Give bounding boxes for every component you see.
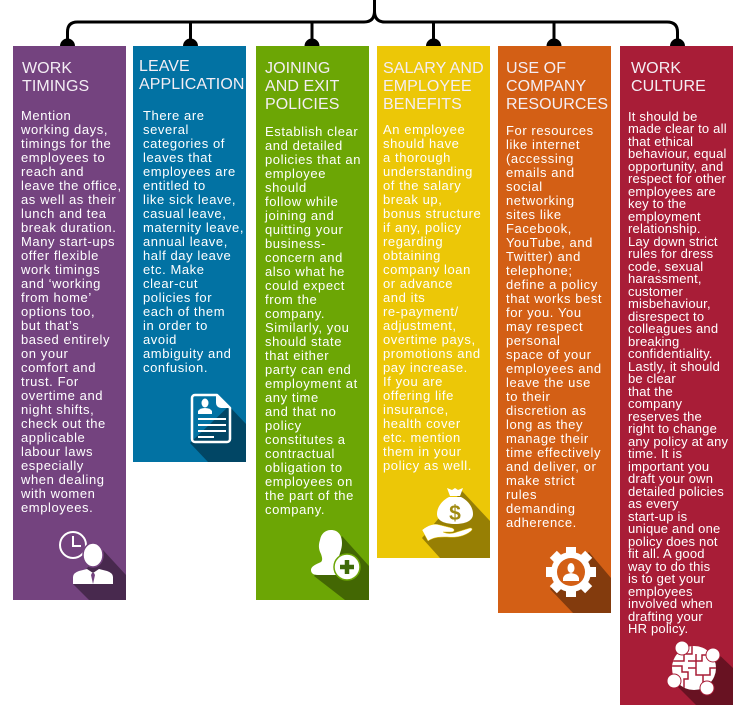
text: work culture: any policy at any: [628, 434, 728, 448]
text: joining and exit policies: quitting your: [265, 222, 343, 237]
text: joining and exit policies: policy: [265, 418, 302, 433]
text: leave application: leaves that: [143, 150, 212, 165]
text: work culture: fit all. A good: [628, 546, 705, 561]
text: joining and exit policies: any time: [265, 390, 319, 405]
text: salary and employee benefits: health cover: [383, 416, 461, 431]
text: work culture: Lay down strict: [628, 234, 718, 248]
text: salary and employee benefits: break up,: [383, 192, 442, 207]
text: joining and exit policies: that either: [265, 348, 329, 363]
text: salary and employee benefits: insurance,: [383, 402, 449, 417]
text: joining and exit policies: company.: [265, 306, 325, 321]
heading: use of company resources: COMPANY: [506, 78, 586, 95]
text: salary and employee benefits: of the salary: [383, 178, 461, 193]
text: salary and employee benefits: them in your: [383, 444, 462, 459]
text: work timings: reach and: [21, 164, 84, 179]
text: work culture: misbehaviour,: [628, 296, 711, 311]
text: work timings: on your: [21, 346, 68, 361]
text: work timings: especially: [21, 458, 84, 473]
text: salary and employee benefits: An employee: [383, 122, 465, 137]
text: work culture: employment: [628, 208, 701, 224]
text: salary and employee benefits: policy as well.: [383, 458, 472, 473]
text: work timings: working days,: [21, 122, 108, 137]
text: work culture: time. It is: [628, 446, 682, 461]
panel: work culture: [620, 46, 733, 705]
text: work timings: check out the: [21, 416, 106, 431]
text: work timings: [21, 108, 122, 515]
heading: leave application: APPLICATION: [139, 76, 244, 93]
text: leave application: confusion.: [143, 360, 208, 375]
text: work culture: detailed policies: [628, 484, 724, 498]
text: work culture: It should be: [628, 108, 698, 124]
text: joining and exit policies: party can end: [265, 362, 351, 377]
text: salary and employee benefits: company loan: [383, 262, 471, 277]
heading: use of company resources: USE OF: [506, 60, 566, 77]
text: work culture: that ethical: [628, 134, 693, 148]
text: work timings: applicable: [21, 430, 85, 445]
text: joining and exit policies: employees on: [265, 474, 353, 489]
text: salary and employee benefits: understanding: [383, 164, 473, 179]
icon: team puzzle: [668, 642, 733, 705]
text: joining and exit policies: policies that an: [265, 152, 361, 167]
text: leave application: entitled to: [143, 178, 206, 193]
text: salary and employee benefits: promotions and: [383, 346, 481, 361]
text: use of company resources: demanding: [506, 501, 576, 516]
text: leave application: avoid: [143, 332, 177, 347]
text: work timings: trust. For: [21, 374, 79, 389]
text: work culture: draft your own: [628, 471, 713, 486]
text: work culture: breaking: [628, 334, 679, 348]
text: use of company resources: discretion as: [506, 403, 587, 418]
text: joining and exit policies: concern and: [265, 250, 343, 265]
text: work timings: lunch and tea: [21, 206, 107, 221]
text: work timings: employees.: [21, 500, 93, 515]
heading: work timings: TIMINGS: [22, 78, 89, 95]
text: use of company resources: leave the use: [506, 375, 591, 390]
text: joining and exit policies: and that no: [265, 404, 336, 419]
panel: salary and employee benefits: [377, 46, 490, 558]
text: work timings: as well as their: [21, 192, 116, 207]
text: salary and employee benefits: pay increase.: [383, 360, 468, 375]
text: work culture: drafting your: [628, 608, 703, 624]
text: use of company resources: [506, 123, 602, 530]
heading: work culture: [631, 60, 706, 95]
text: use of company resources: define a policy: [506, 277, 598, 292]
text: salary and employee benefits: regarding: [383, 234, 443, 249]
text: use of company resources: to their: [506, 389, 550, 404]
text: work culture: be clear: [628, 371, 676, 386]
text: use of company resources: emails and: [506, 165, 575, 180]
text: use of company resources: personal: [506, 333, 561, 348]
text: salary and employee benefits: or advance: [383, 276, 453, 291]
text: joining and exit policies: business-: [265, 236, 326, 251]
text: leave application: several: [143, 122, 189, 137]
text: joining and exit policies: contractual: [265, 446, 335, 461]
icon: money bag in hand: [422, 488, 490, 558]
text: joining and exit policies: should state: [265, 334, 342, 349]
text: use of company resources: employees and: [506, 361, 602, 376]
text: work culture: right to change: [628, 421, 717, 436]
text: joining and exit policies: also what he: [265, 264, 345, 279]
text: leave application: categories of: [143, 136, 225, 151]
text: salary and employee benefits: bonus structure: [383, 206, 481, 221]
text: work timings: employees to: [21, 150, 105, 165]
text: salary and employee benefits: should have: [383, 136, 460, 151]
icon: clock and manager: [59, 531, 126, 600]
text: salary and employee benefits: obtaining: [383, 248, 441, 263]
text: work culture: way to do this: [628, 558, 710, 574]
text: leave application: There are: [143, 108, 205, 123]
text: joining and exit policies: employee: [265, 166, 326, 181]
text: use of company resources: (accessing: [506, 151, 574, 166]
heading: work timings: WORK: [22, 60, 72, 77]
heading: joining and exit policies: [265, 60, 340, 113]
text: use of company resources: that works best: [506, 291, 602, 306]
text: use of company resources: and deliver, or: [506, 459, 596, 474]
text: joining and exit policies: Establish clear: [265, 124, 358, 139]
text: work timings: Many start-ups: [21, 234, 115, 249]
heading: leave application: LEAVE: [139, 58, 190, 75]
text: work timings: work timings: [21, 262, 100, 277]
text: work timings: break duration.: [21, 220, 116, 235]
text: use of company resources: Facebook,: [506, 221, 572, 236]
text: work culture: employees: [628, 584, 693, 598]
text: salary and employee benefits: adjustment,: [383, 318, 457, 333]
text: work culture: customer: [628, 284, 683, 298]
text: work timings: with women: [21, 486, 95, 501]
text: joining and exit policies: constitutes a: [265, 432, 346, 447]
panel: work timings: [13, 46, 126, 600]
text: leave application: clear-cut: [143, 276, 198, 291]
text: work culture: important you: [628, 458, 709, 474]
text: joining and exit policies: could expect: [265, 278, 345, 293]
text: work culture: harassment,: [628, 271, 702, 286]
text: work culture: company: [628, 396, 682, 411]
heading: salary and employee benefits: EMPLOYEE: [383, 78, 472, 95]
text: leave application: maternity leave,: [143, 220, 244, 235]
text: work timings: comfort and: [21, 360, 96, 375]
text: use of company resources: networking: [506, 193, 575, 208]
text: use of company resources: may respect: [506, 319, 583, 334]
text: work timings: but that’s: [21, 318, 79, 333]
text: salary and employee benefits: [383, 122, 481, 473]
text: salary and employee benefits: overtime pays,: [383, 332, 476, 347]
text: leave application: each of them: [143, 304, 225, 319]
text: work timings: based entirely: [21, 332, 110, 347]
text: work culture: as every: [628, 496, 679, 511]
text: use of company resources: long as they: [506, 417, 583, 432]
text: leave application: ambiguity and: [143, 346, 231, 361]
text: use of company resources: make strict: [506, 473, 575, 488]
text: use of company resources: telephone;: [506, 263, 573, 278]
text: leave application: half day leave: [143, 248, 231, 263]
text: work culture: key to the: [628, 196, 686, 211]
text: work timings: timings for the: [21, 136, 111, 151]
text: work culture: disrespect to: [628, 308, 704, 324]
text: salary and employee benefits: and its: [383, 290, 425, 305]
panel: use of company resources: [498, 46, 611, 613]
heading: salary and employee benefits: BENEFITS: [383, 96, 462, 113]
text: use of company resources: rules: [506, 487, 537, 502]
text: work culture: unique and one: [628, 521, 720, 536]
text: work culture: HR policy.: [628, 621, 688, 636]
heading: work timings: [22, 60, 89, 95]
text: work timings: when dealing: [21, 472, 105, 487]
text: leave application: employees are: [143, 164, 236, 179]
text: leave application: policies for: [143, 290, 212, 305]
heading: salary and employee benefits: [383, 60, 484, 113]
text: work culture: relationship.: [628, 221, 701, 236]
text: work culture: involved when: [628, 596, 713, 611]
text: work culture: behaviour, equal: [628, 146, 727, 161]
text: salary and employee benefits: if any, policy: [383, 220, 462, 235]
text: salary and employee benefits: a thorough: [383, 150, 451, 165]
text: use of company resources: space of your: [506, 347, 592, 362]
text: joining and exit policies: and detailed: [265, 138, 343, 153]
text: use of company resources: for you. You: [506, 305, 582, 320]
text: joining and exit policies: employment at: [265, 376, 358, 391]
text: use of company resources: manage their: [506, 431, 589, 446]
icon: money bag in hand: $: [449, 502, 461, 525]
icon: gear with person: [546, 547, 611, 613]
text: leave application: casual leave,: [143, 206, 226, 221]
text: joining and exit policies: from the: [265, 292, 317, 307]
heading: work culture: WORK: [631, 60, 681, 77]
text: work culture: respect for other: [628, 171, 726, 186]
text: work timings: and ‘working: [21, 276, 101, 291]
text: use of company resources: time effectively: [506, 445, 601, 460]
text: work culture: policy does not: [628, 534, 718, 548]
text: work culture: employees are: [628, 184, 716, 198]
text: use of company resources: adherence.: [506, 515, 577, 530]
heading: joining and exit policies: POLICIES: [265, 96, 339, 113]
text: joining and exit policies: joining and: [265, 208, 334, 223]
text: work culture: rules for dress: [628, 246, 713, 261]
heading: leave application: [139, 58, 244, 93]
heading: use of company resources: RESOURCES: [506, 96, 608, 113]
text: work timings: labour laws: [21, 444, 93, 459]
text: work culture: [628, 108, 728, 636]
text: work culture: that the: [628, 384, 673, 398]
text: work culture: start-up is: [628, 508, 687, 524]
connector tree: [60, 0, 685, 46]
text: work culture: confidentiality.: [628, 346, 713, 361]
text: work culture: Lastly, it should: [628, 358, 720, 374]
heading: use of company resources: [506, 60, 608, 113]
text: work timings: overtime and: [21, 388, 103, 403]
icon: resume document: [190, 394, 246, 462]
text: work culture: colleagues and: [628, 321, 718, 336]
text: salary and employee benefits: etc. mention: [383, 430, 461, 445]
text: work timings: night shifts,: [21, 402, 94, 417]
heading: work culture: CULTURE: [631, 78, 706, 95]
text: joining and exit policies: obligation to: [265, 460, 343, 475]
text: leave application: in order to: [143, 318, 208, 333]
text: joining and exit policies: [264, 124, 361, 517]
text: joining and exit policies: Similarly, you: [265, 320, 349, 335]
text: joining and exit policies: company.: [265, 502, 325, 517]
icon: add user: [311, 530, 369, 600]
text: use of company resources: like internet: [506, 137, 580, 152]
text: leave application: annual leave,: [143, 234, 228, 249]
heading: salary and employee benefits: SALARY AND: [383, 60, 484, 77]
text: salary and employee benefits: If you are: [383, 374, 443, 389]
text: salary and employee benefits: offering life: [383, 388, 454, 403]
text: leave application: etc. Make: [143, 262, 205, 277]
text: work culture: opportunity, and: [628, 158, 723, 174]
heading: joining and exit policies: JOINING: [265, 60, 330, 77]
text: use of company resources: sites like: [506, 207, 562, 222]
text: work timings: options too,: [21, 304, 95, 319]
text: leave application: [143, 108, 244, 375]
text: joining and exit policies: should: [265, 180, 307, 195]
text: work timings: Mention: [21, 108, 71, 123]
text: work culture: is to get your: [628, 571, 705, 586]
text: salary and employee benefits: re-payment/: [383, 304, 459, 319]
text: use of company resources: social: [506, 179, 543, 194]
panel: leave application: [133, 46, 246, 462]
text: joining and exit policies: the part of the: [265, 488, 354, 503]
text: leave application: like sick leave,: [143, 192, 236, 207]
text: use of company resources: For resources: [506, 123, 594, 138]
text: work timings: offer flexible: [21, 248, 99, 263]
heading: joining and exit policies: AND EXIT: [265, 78, 339, 95]
text: use of company resources: YouTube, and: [506, 235, 593, 250]
text: work culture: reserves the: [628, 408, 702, 424]
text: use of company resources: Twitter) and: [506, 249, 581, 264]
text: joining and exit policies: follow while: [265, 194, 338, 209]
text: work culture: made clear to all: [628, 121, 727, 136]
panel: joining and exit policies: [256, 46, 369, 600]
text: work timings: from home’: [21, 290, 92, 305]
text: work timings: leave the office,: [21, 178, 122, 193]
text: work culture: code, sexual: [628, 258, 703, 274]
